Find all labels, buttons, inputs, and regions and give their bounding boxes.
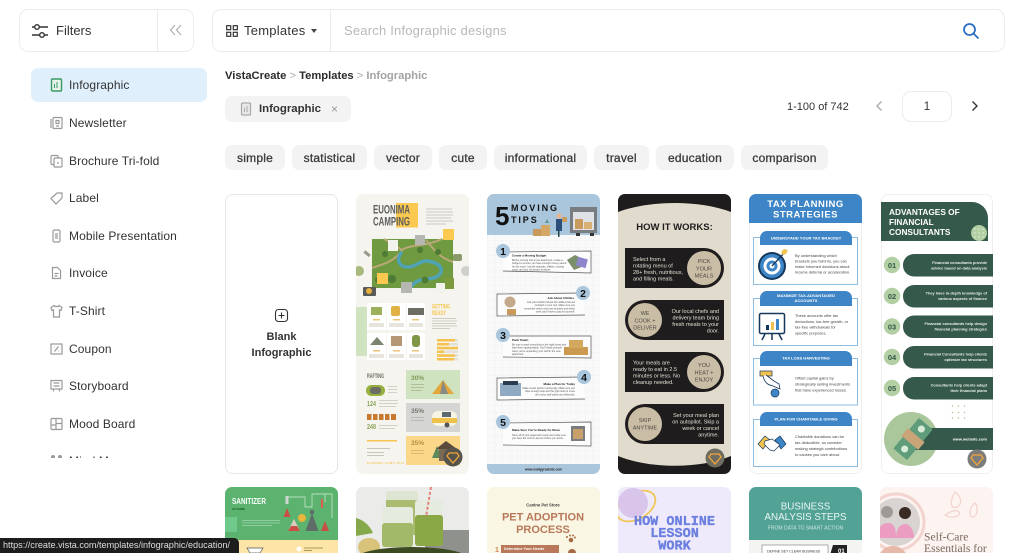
big number 5: 5 [495, 201, 509, 231]
title: ANALYSIS STEPS [764, 512, 847, 523]
category: Mood Board: Mood Board [69, 417, 135, 431]
title: BUSINESS [781, 502, 830, 512]
step 4: Set your meal plan [673, 413, 719, 419]
body text [242, 520, 280, 526]
photo background [356, 487, 469, 553]
category: Storyboard: Storyboard [69, 379, 129, 393]
advantage 02: They have in-depth knowledge of [926, 290, 987, 296]
step 1: Select from a [633, 257, 665, 263]
tip 4: Make a plan before moving day. Make sure you [523, 387, 575, 390]
icon: plus box [276, 310, 288, 322]
sanitizer background [225, 487, 338, 553]
section 2 [754, 291, 858, 346]
category: Label [50, 191, 99, 205]
section 1: make informed decisions about [795, 264, 850, 269]
category: Newsletter: Newsletter [69, 116, 127, 130]
section 2: These accounts offer tax [795, 313, 838, 318]
tag: education [656, 145, 734, 170]
section 2: MAXIMIZE TAX-ADVANTAGED [777, 293, 835, 298]
getting ready heading: GETTING [432, 304, 450, 310]
template gallery [225, 194, 993, 553]
status bar url tooltip [0, 538, 239, 553]
blank card label: Infographic [252, 347, 311, 359]
advantage 01: advice based on data analysis [931, 266, 987, 271]
section 4: making strategic contributions [795, 446, 847, 451]
tag: informational [494, 145, 587, 170]
title: HOW ONLINE [634, 515, 715, 530]
category: Invoice [52, 266, 108, 280]
heading: STRATEGIES [773, 210, 838, 220]
tip 1: for the move. Include deposits, utilities, moving [512, 265, 564, 268]
kiwi [358, 538, 380, 553]
section 1 [754, 231, 858, 284]
intro text [426, 208, 453, 224]
header band [749, 194, 862, 223]
premium badge [706, 448, 724, 468]
premium badge [444, 448, 462, 466]
icon: infographic [240, 102, 252, 116]
moving tips heading: MOVING [511, 203, 559, 213]
category: Brochure Tri-fold: Brochure Tri-fold [69, 154, 159, 168]
card background [618, 487, 731, 553]
step 1 text: Determine Your Needs [504, 547, 544, 551]
sanitizer title: SANITIZER [232, 497, 266, 506]
tag: comparison [741, 145, 828, 170]
step 3 [625, 352, 724, 392]
rafting heading: RAFTING [367, 373, 384, 380]
footer band [487, 464, 600, 474]
card: 5 Moving Tips [487, 194, 600, 474]
advantage 01: Financial consultants provide [932, 260, 987, 265]
paw icon [566, 534, 576, 542]
tag: cute [439, 145, 487, 170]
header circle [971, 225, 987, 241]
tip 3: apartment. [512, 353, 524, 356]
search bar [212, 9, 1005, 52]
tip 4: all of your stuff safely and efficiently. [535, 393, 575, 396]
blank card frame [226, 194, 338, 474]
step 2: WE [641, 311, 649, 317]
step 3: minutes or less. No [633, 374, 680, 380]
advantage 03 [884, 316, 1013, 338]
filters label: Filters [56, 23, 91, 38]
tip 5: Have all of your paperwork ready and make sure [512, 434, 566, 437]
advantage 05: Consultants help clients adapt [931, 382, 987, 388]
tip 3: Pack Smart [512, 338, 528, 342]
category: Infographic: Infographic [69, 78, 129, 92]
tip 2: 2 [580, 288, 586, 300]
card background [882, 194, 992, 474]
category: Invoice: Invoice [69, 266, 108, 280]
breadcrumb: VistaCreate > Templates > Infographic [225, 70, 427, 82]
panel: 35% cabin: 35% [411, 440, 424, 447]
step 1: YOUR [696, 266, 712, 272]
dot pattern [952, 405, 965, 419]
title: LESSON [650, 527, 699, 542]
blank card label: Blank [267, 331, 296, 343]
step 1: MEALS [695, 274, 714, 280]
icon: search [963, 23, 980, 40]
advantage 03: financial planning strategies [934, 327, 987, 332]
icon: double chevron [170, 24, 182, 36]
section 2: tax-free withdrawals for [795, 325, 836, 330]
section 3: that have experienced losses. [795, 388, 847, 392]
green side strip [356, 307, 367, 356]
pagination count: 1-100 of 742 [787, 100, 849, 112]
section 3 [754, 351, 858, 405]
advantage 03: 03 [888, 322, 896, 331]
category: T-Shirt: T-Shirt [69, 304, 105, 318]
subtitle: AT HOME [232, 507, 245, 511]
rafting stat 248: 248 [367, 424, 376, 431]
lower portrait [878, 546, 908, 553]
sidebar: template categories [31, 68, 207, 102]
tip 4: Make a Plan for Today [544, 382, 575, 386]
search divider [330, 10, 331, 51]
card: Sanitizer [225, 487, 338, 553]
footer divider [367, 440, 397, 442]
category: Coupon [50, 342, 112, 356]
raft people icons [367, 414, 396, 420]
step 4: SKIP [639, 418, 651, 424]
panel: 35% camper [406, 403, 460, 432]
step 1: rotating menu of [633, 264, 673, 270]
getting ready text [432, 318, 457, 329]
getting ready heading [432, 304, 450, 315]
category: Mobile Presentation: Mobile Presentation [69, 229, 177, 243]
tip 1: costs, and any necessary furniture. [512, 269, 551, 272]
advantage 04 [884, 346, 1013, 368]
woman left [877, 506, 896, 538]
icon: templates grid [226, 25, 238, 37]
tip 5: you have the most in-person before you arrive. [512, 437, 564, 440]
title highlight [396, 203, 418, 228]
page number box: 1 [924, 101, 930, 113]
card: Tax Planning Strategies [749, 194, 862, 474]
advantage 01 [884, 254, 1013, 276]
steps tiles [367, 303, 425, 360]
raft icon [366, 385, 385, 396]
search placeholder: Search Infographic designs [344, 23, 507, 38]
tip 1 [496, 244, 591, 273]
panel: 35% camper: 35% [411, 408, 424, 415]
dark plate [357, 547, 467, 553]
advantage 04: Financial Consultants help clients [924, 352, 987, 356]
step 4: on autopilot. Skip a [672, 420, 720, 426]
card background with grid [487, 194, 600, 474]
step 4: week or cancel [681, 426, 719, 432]
section 1: By understanding which [795, 253, 837, 258]
drop decoration [945, 492, 977, 517]
front glass right [415, 500, 443, 546]
title [373, 205, 410, 226]
leaf [356, 518, 373, 536]
tag: vector [374, 145, 432, 170]
step 3: Your meals are [633, 360, 670, 366]
collapse button [157, 10, 195, 51]
tip 1: Create a Moving Budget [512, 254, 546, 258]
card: Pet Adoption Process [487, 487, 600, 553]
tip 1: 1 [500, 246, 506, 258]
website band [884, 412, 993, 466]
title: Self-Care [924, 530, 968, 544]
tag: vector: vector [386, 151, 420, 165]
arc decoration [868, 494, 924, 550]
card background [487, 487, 600, 553]
card: Advantages of Financial Consultants [881, 194, 1013, 474]
front glass left [382, 507, 413, 547]
tag: travel: travel [606, 151, 637, 165]
heading: FINANCIAL [889, 217, 934, 227]
tip 2: ones you'll have to pay for yourself. [536, 311, 575, 314]
bar chart [437, 339, 458, 360]
tip 1: budget to ensure you have enough money saved [512, 262, 567, 265]
tip 5: Make Sure You're Ready for Move [512, 428, 560, 432]
icon: filter sliders [32, 24, 48, 38]
tip 5: 5 [500, 417, 506, 429]
category: Label: Label [69, 191, 99, 205]
card: Euonima Camping [354, 194, 471, 474]
planet ring [611, 484, 661, 528]
tip 5 [496, 415, 591, 446]
tip 3: label them appropriately. You'll thank yourself [512, 347, 562, 350]
section 1: income deferral or acceleration. [795, 270, 850, 274]
getting ready heading: READY [432, 310, 446, 317]
section 2: specific purposes. [795, 330, 827, 335]
category: Coupon: Coupon [69, 342, 112, 356]
step 3: ENJOY [695, 378, 713, 384]
advantage 01: 01 [888, 261, 896, 270]
moving tips heading: TIPS [511, 215, 539, 225]
tip 4 [497, 370, 591, 400]
header [881, 202, 988, 241]
status bar url tooltip: https://create.vista.com/templates/infographic/education/ [3, 540, 230, 550]
panel: 35% cabin [406, 436, 460, 465]
table [425, 530, 469, 553]
card background [749, 487, 862, 553]
section 3: strategically selling investments [795, 382, 850, 386]
card: How Online Lesson Work [611, 484, 731, 553]
footer text [367, 448, 390, 456]
title: CAMPING [373, 216, 410, 228]
website: www.reallygreatsite.com [524, 468, 562, 472]
filters button [19, 9, 194, 52]
heading: CONSULTANTS [889, 227, 951, 237]
website band: www.website.com [952, 436, 987, 442]
card: Business Analysis Steps [749, 487, 862, 553]
card: How It Works [618, 194, 731, 474]
tag: informational: informational [505, 151, 576, 165]
section 3: Offset capital gains by [795, 376, 834, 380]
step 1: PICK [698, 259, 710, 265]
step 3: ready to eat in 2.5 [633, 367, 677, 373]
step 2: COOK + [635, 318, 655, 324]
planet [618, 488, 648, 518]
templates dropdown: Templates [244, 23, 306, 38]
tip 3: Be sure to pack everything in the right boxes and [512, 344, 566, 346]
title: PROCESS [516, 524, 570, 536]
panel: 30% tent: 30% [411, 375, 424, 382]
advantage 02 [884, 285, 1013, 308]
tip 3: when you're unpacking your stuff in the new [512, 350, 561, 353]
advantage 03: Financial consultants help design [925, 321, 987, 326]
section 4: PLAN FOR CHARITABLE GIVING [774, 416, 838, 422]
tip 2: Ask your landlord about the utilities that are [527, 301, 575, 304]
step 3: cleanup needed. [633, 380, 674, 386]
tag: comparison: comparison [752, 151, 817, 165]
rafting stat 124: 124 [367, 401, 376, 408]
lower note [296, 546, 323, 552]
heading: TAX PLANNING [767, 199, 844, 210]
tag: statistical [292, 145, 367, 170]
side block [225, 517, 237, 532]
tip 2 [497, 286, 590, 316]
step 4: ANYTIME [633, 425, 658, 431]
card background [356, 194, 469, 474]
heading: HOW IT WORKS: [636, 222, 713, 233]
premium badge [968, 450, 986, 468]
section 2: deductions, tax-free growth, or [795, 319, 849, 324]
card background [880, 487, 993, 553]
title: PET ADOPTION [502, 512, 584, 524]
advantage 04: 04 [888, 353, 897, 362]
step 3: HEAT + [695, 370, 713, 376]
tip 4: have enough help and the right tools to move [525, 390, 576, 393]
advantage 04: optimize tax structures [944, 357, 987, 362]
chip label: Infographic [259, 103, 321, 115]
step 2: Our local chefs and [672, 309, 719, 315]
advantage 05: 05 [888, 384, 896, 393]
step 2: fresh meals to your [672, 322, 719, 328]
section 3: TAX LOSS HARVESTING [782, 356, 830, 360]
chip close: × [331, 102, 338, 116]
panel: 30% tent [406, 370, 460, 399]
tip 2: included in your rent. Make sure you [535, 304, 576, 307]
heading: ADVANTAGES OF [889, 207, 960, 217]
step 1: and filling meals. [633, 276, 674, 282]
icon: cash bundle [892, 417, 934, 461]
step 1 [625, 248, 724, 288]
tag: travel [594, 145, 649, 170]
white panel [749, 540, 862, 553]
tag: simple: simple [237, 151, 273, 165]
step 1 banner [501, 545, 559, 553]
section 1: brackets you fall into, you can [795, 258, 847, 264]
step 2 [625, 300, 724, 340]
bottom curve [618, 456, 731, 474]
tag: education: education [668, 151, 722, 165]
pagination previous [876, 101, 882, 111]
section 4: Charitable donations can be [795, 434, 844, 439]
advantage 05 [884, 377, 1013, 400]
page number box [902, 91, 952, 122]
card background [750, 194, 862, 474]
step 4 [625, 404, 724, 444]
pagination next [972, 101, 978, 111]
map illustration [354, 229, 471, 296]
subtitle: FROM DATA TO SMART ACTION [768, 526, 844, 532]
card: Self-Care Essentials [868, 487, 993, 553]
rafting small text [379, 386, 398, 429]
card: blank infographic [226, 194, 338, 474]
tip 1: Before moving into a new apartment, create a [512, 259, 563, 262]
portrait circle [872, 498, 920, 546]
advantage 02: various aspects of finance [938, 296, 988, 301]
straw [426, 487, 431, 517]
rear glass [386, 491, 418, 535]
step 2: delivery team bring [673, 316, 719, 322]
footer brand: EUONIMA CAMP 2015 [367, 461, 405, 465]
active highlight [31, 68, 207, 102]
top curve [618, 194, 731, 212]
active filter chip [225, 96, 351, 122]
header band [487, 194, 600, 235]
step 2: DELIVER [633, 326, 657, 332]
tag: statistical: statistical [304, 151, 355, 165]
category: T-Shirt [50, 304, 105, 318]
step 2: door. [707, 328, 719, 334]
advantage 05: their financial plans [950, 388, 987, 393]
section 4 [754, 412, 858, 466]
tip 2: Ask About Utilities [547, 296, 574, 300]
section 2: ACCOUNTS [795, 298, 818, 303]
card background [618, 194, 731, 474]
section 1: UNDERSTAND YOUR TAX BRACKET [771, 236, 842, 240]
title: EUONIMA [373, 204, 410, 216]
tag: cute: cute [451, 151, 475, 165]
step 3: YOU [698, 363, 710, 369]
tip 3 [496, 328, 591, 358]
section 4: tax-deductible, so consider [795, 440, 843, 445]
section 4: to causes you care about. [795, 452, 840, 457]
tip 4: 4 [581, 372, 587, 384]
step 4: anytime. [698, 432, 719, 438]
lower band [225, 540, 338, 553]
tip 3: 3 [500, 330, 506, 342]
lab flasks [284, 494, 332, 531]
brown circle [568, 549, 576, 553]
tag: simple [225, 145, 285, 170]
woman right [896, 507, 914, 538]
movers illustration [533, 207, 597, 237]
card: green smoothie [356, 487, 469, 553]
tip 2: remember which ones are included and which [524, 307, 576, 310]
small title: Canine Pet Store [526, 502, 560, 508]
funnel icon [247, 548, 263, 553]
dropdown caret [311, 29, 317, 33]
step 1: 28+ fresh, nutritious, [633, 270, 683, 276]
advantage 02: 02 [888, 292, 896, 301]
